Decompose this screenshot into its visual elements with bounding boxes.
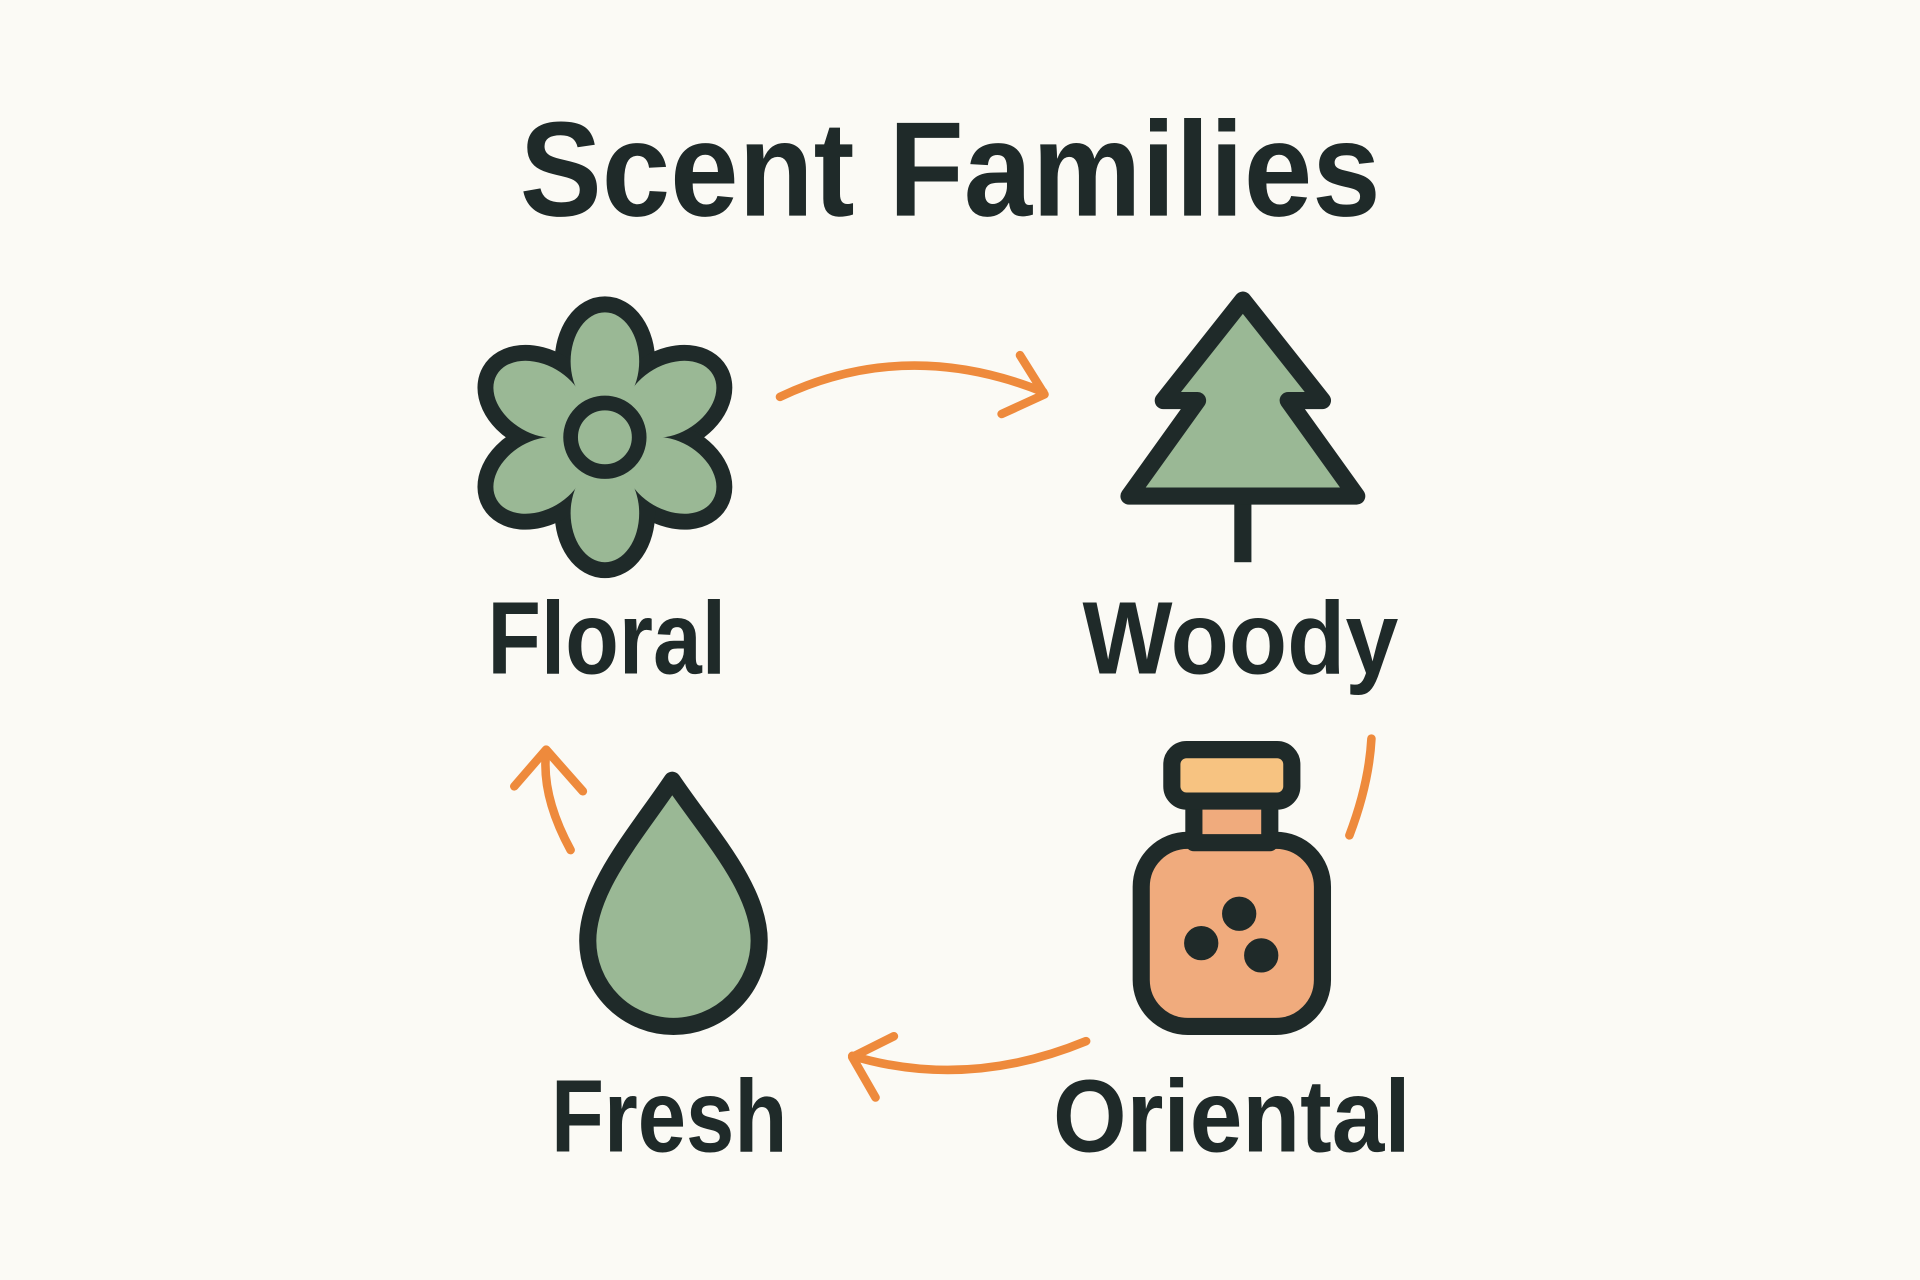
label: Woody: Woody [1082,581,1398,696]
label: Floral: Floral [487,581,726,696]
icon: tree [1129,300,1357,562]
arrow: oriental to fresh [852,1036,1086,1097]
label: Oriental: Oriental [1053,1058,1411,1173]
arrow: fresh to floral [514,750,583,850]
arrow: woody to oriental [1349,739,1371,835]
icon: drop [588,780,759,1026]
arrow: floral to woody [780,355,1044,414]
title: Scent Families [520,94,1381,245]
icon: flower [480,312,730,562]
label: Fresh: Fresh [551,1058,787,1173]
icon: jar [1141,750,1322,1026]
